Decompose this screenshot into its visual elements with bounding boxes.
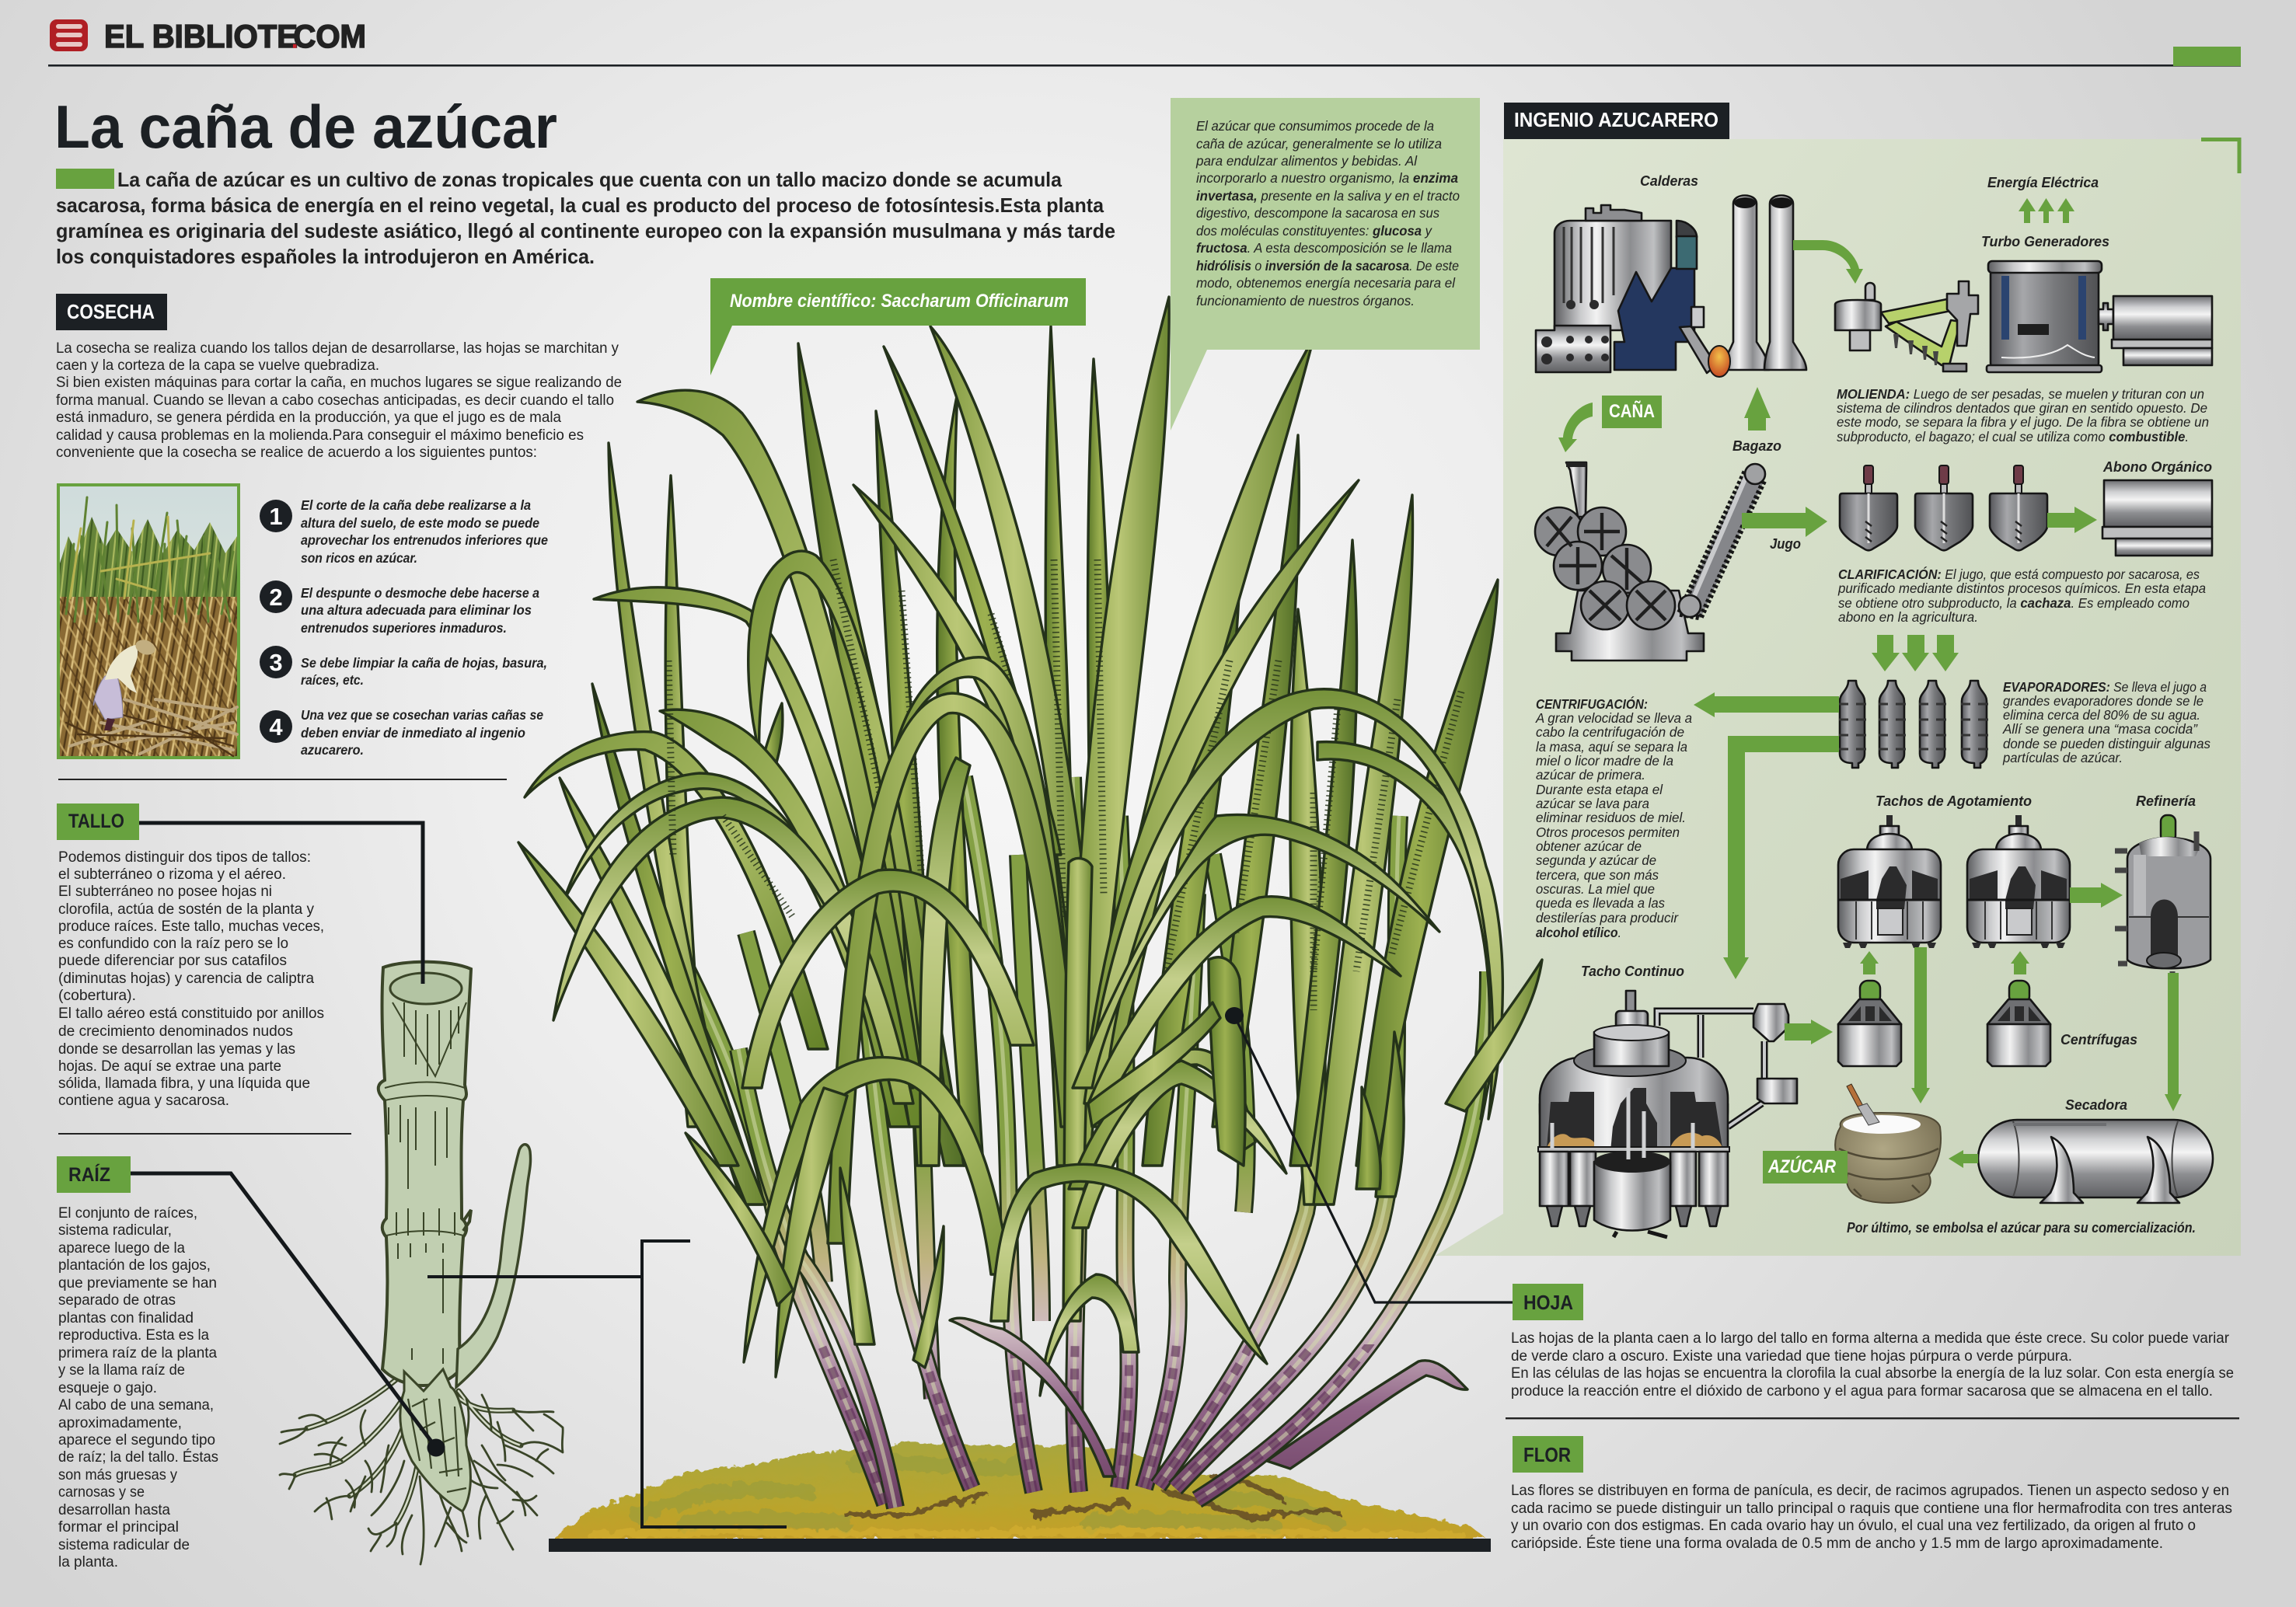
text: molienda: este modo, se separa la fibra y el jugo. De la fibra se obtiene un: [1837, 414, 2209, 430]
point 1: altura del suelo, de este modo se puede: [301, 515, 539, 531]
machine: abono orgánico: [2102, 480, 2212, 556]
text: evaporadores: Allí se genera una “masa cocida”: [2002, 721, 2198, 737]
point 2: 2: [269, 584, 283, 611]
point 4: 4: [269, 713, 283, 741]
callout: sugar digestion: El azúcar que consumimos procede de la: [1196, 118, 1434, 134]
leaf hatching: [668, 559, 1461, 1010]
point 1: 1: [269, 503, 283, 530]
hoja text: produce la reacción entre el dióxido de carbono y el agua para formar sacarosa que se almacena en el tallo.: [1511, 1382, 2213, 1400]
point 2: El despunte o desmoche debe hacerse a: [301, 585, 539, 601]
raiz text: plantación de los gajos,: [58, 1257, 211, 1274]
ingenio heading: [1504, 103, 1729, 139]
leader: tallo: [139, 823, 423, 984]
stem details: [385, 973, 471, 1364]
raiz text: y se la llama raíz de: [58, 1361, 185, 1379]
front blades: [686, 657, 1542, 1476]
arrow: down to evaporadores: [1872, 635, 1959, 671]
cosecha heading: COSECHA: [67, 300, 155, 323]
machine labels: Jugo: [1770, 535, 1801, 552]
machine: calderas: [1536, 196, 1806, 377]
point 1: son ricos en azúcar.: [301, 550, 417, 566]
machine labels: Por último, se embolsa el azúcar para su comercialización.: [1847, 1219, 2196, 1236]
callout: sugar digestion: para endulzar alimentos y bebidas. Al: [1195, 153, 1418, 169]
text: clarificación: se obtiene otro subproducto, la cachaza. Es empleado como: [1838, 595, 2190, 611]
tallo text: puede diferenciar por sus catafilos: [58, 952, 287, 969]
tallo text: Podemos distinguir dos tipos de tallos:: [58, 849, 311, 866]
callout: sugar digestion: fructosa. A esta descomposición se le llama: [1196, 240, 1452, 256]
raiz text: aparece el segundo tipo: [58, 1431, 215, 1448]
text: centrifugación: segunda y azúcar de: [1536, 852, 1656, 868]
photo: harvest in the cane field: [57, 483, 240, 759]
hoja heading: HOJA: [1523, 1291, 1573, 1314]
text: centrifugación: tercera, que son más: [1536, 867, 1659, 883]
hoja text: En las células de las hojas se encuentra la clorofila la cual absorbe la energía de la luz solar. Con esta energía se: [1511, 1365, 2234, 1382]
arrow: refinería to secadora: [2165, 973, 2182, 1111]
callout: sugar digestion: caña de azúcar, generalmente se lo utiliza: [1196, 136, 1442, 152]
raiz text: separado de otras: [58, 1292, 176, 1309]
arrow: bagazo: [1744, 387, 1771, 431]
raiz text: plantas con finalidad: [58, 1309, 194, 1326]
intro text block: [56, 168, 1115, 268]
hoja heading: [1513, 1284, 1583, 1320]
cosecha text: conveniente que la cosecha se realice de acuerdo a los siguientes puntos:: [56, 444, 537, 461]
text: centrifugación: A gran velocidad se lleva a: [1535, 710, 1692, 726]
tallo text: El tallo aéreo está constituido por anillos: [58, 1005, 324, 1022]
arrow: secadora to saco: [1949, 1150, 1978, 1168]
raiz text: aparece luego de la: [58, 1239, 185, 1257]
machine: tacho continuo: [1538, 991, 1797, 1237]
stem body: [379, 962, 471, 1386]
callout: sugar digestion: hidrólisis o inversión de la sacarosa. De este: [1196, 258, 1459, 274]
point 2: [260, 580, 539, 636]
text: centrifugación: Durante esta etapa el: [1536, 782, 1663, 797]
section: flor: [1511, 1436, 2232, 1552]
machine: centrífugas: [1838, 981, 2050, 1066]
label: azúcar: AZÚCAR: [1767, 1156, 1837, 1177]
flor heading: [1513, 1436, 1583, 1473]
hoja text: [1511, 1330, 2234, 1400]
point 3: 3: [269, 649, 283, 676]
roots: [280, 1379, 563, 1564]
arrow: evaporadores to tacho continuo: [1723, 736, 1839, 979]
label: azúcar: [1763, 1151, 1848, 1183]
ground mound: [550, 1443, 1488, 1540]
callout: sugar digestion: [1171, 98, 1480, 431]
young shoot: [456, 1145, 531, 1387]
raiz text: desarrollan hasta: [58, 1501, 170, 1518]
stalk mottling: [818, 1344, 1374, 1505]
header: logo: [50, 18, 366, 54]
text: evaporadores: grandes evaporadores donde se le: [2003, 693, 2204, 709]
title: La caña de azúcar: [54, 92, 557, 161]
flor text: [1511, 1482, 2232, 1552]
raiz heading: [57, 1156, 131, 1193]
tallo text: donde se desarrollan las yemas y las: [58, 1041, 295, 1058]
machine: turbina: [1835, 281, 1978, 371]
text: centrifugación: queda es llevada a las: [1536, 895, 1665, 911]
leader lines: [131, 823, 1513, 1527]
callout: sugar digestion: invertasa, presente en la saliva y en el tracto: [1196, 188, 1460, 204]
label: caña: CAÑA: [1609, 400, 1655, 422]
point 2: entrenudos superiores inmaduros.: [301, 620, 507, 636]
machine: evaporadores: [1839, 681, 1988, 768]
callout: sugar digestion: incorporarlo a nuestro organismo, la enzima: [1196, 170, 1458, 186]
cosecha text: calidad y causa problemas en la molienda.Para conseguir el máximo beneficio es: [56, 427, 584, 444]
numbered points: [260, 497, 548, 758]
text: centrifugación: CENTRIFUGACIÓN:: [1536, 695, 1648, 712]
flor text: Las flores se distribuyen en forma de panícula, es decir, de racimos agrupados. Tienen un aspecto sedoso y en: [1511, 1482, 2229, 1499]
machine: tachos de agotamiento: [1838, 815, 2070, 948]
text: centrifugación: obtener azúcar de: [1536, 838, 1642, 854]
raiz text: aproximadamente,: [58, 1414, 182, 1431]
header green tab: [2173, 47, 2241, 66]
root crown: [400, 1369, 470, 1511]
callout: scientific name: [710, 278, 1086, 375]
machine labels: Abono Orgánico: [2102, 458, 2212, 475]
tallo text: sólida, llamada fibra, y una líquida que: [58, 1075, 310, 1092]
tallo heading: TALLO: [68, 810, 124, 832]
point 3: Se debe limpiar la caña de hojas, basura,: [301, 655, 547, 671]
hoja text: de verde claro a oscuro. Existe una variedad que tiene hojas púrpura o verde púrpura.: [1511, 1347, 2072, 1365]
base bar: [549, 1539, 1491, 1552]
arrow: energía eléctrica: [2019, 198, 2074, 223]
raiz text: carnosas y se: [58, 1483, 145, 1501]
machine labels: Refinería: [2136, 793, 2196, 809]
point 1: El corte de la caña debe realizarse a la: [301, 497, 531, 513]
arrow: caña to molino: [1558, 403, 1593, 452]
raiz text: sistema radicular,: [58, 1222, 172, 1239]
text: evaporadores: donde se pueden distinguir algunas: [2003, 736, 2211, 751]
tallo text: el subterráneo o rizoma y el aéreo.: [58, 866, 286, 883]
tallo text: produce raíces. Este tallo, muchas veces,: [58, 918, 324, 935]
machine labels: Centrífugas: [2060, 1031, 2137, 1048]
arrow: jugo: [1742, 507, 1827, 537]
point 3: [260, 646, 547, 688]
section: hoja: [1511, 1284, 2234, 1400]
arrow: tachos to refinería: [2070, 883, 2123, 908]
section: raiz: [57, 1156, 218, 1570]
tallo text: clorofila, actúa de sostén de la planta y: [58, 901, 314, 918]
back blades: [518, 297, 1498, 1204]
arrow: tachos to saco: [1911, 947, 1930, 1103]
machine labels: Calderas: [1640, 173, 1698, 189]
text: clarificación: abono en la agricultura.: [1838, 609, 1978, 625]
text: centrifugación: azúcar de primera.: [1536, 767, 1645, 783]
tallo text: El subterráneo no posee hojas ni: [58, 883, 272, 900]
raiz text: son más gruesas y: [58, 1466, 177, 1483]
cosecha text: está inmaduro, se genera pérdida en la producción, ya que el jugo es de mala: [56, 409, 561, 426]
machine labels: Turbo Generadores: [1981, 233, 2109, 249]
text: evaporadores: partículas de azúcar.: [2002, 750, 2123, 765]
machine labels: [1581, 173, 2212, 1236]
intro text block: los conquistadores españoles la introdujeron en América.: [56, 245, 595, 268]
callout: scientific name: Nombre científico: Saccharum Officinarum: [730, 291, 1069, 312]
intro text block: sacarosa, forma básica de energía en el reino vegetal, la cual es producto del proceso de fotosíntesis.Esta planta: [56, 193, 1104, 217]
leader: tallo bracket: [427, 1241, 787, 1527]
text: clarificación: [1837, 566, 2206, 625]
raiz text: sistema radicular de: [58, 1536, 190, 1553]
callout: sugar digestion: dos moléculas constituyentes: glucosa y: [1196, 223, 1432, 239]
point 3: raíces, etc.: [301, 672, 364, 688]
callout: sugar digestion: modo, obtenemos energía necesaria para el: [1196, 275, 1456, 291]
process diagram: [1535, 173, 2213, 1237]
intro green marker: [56, 169, 114, 189]
raiz text: formar el principal: [58, 1518, 179, 1536]
woman harvesting: [93, 637, 157, 730]
text: molienda: MOLIENDA: Luego de ser pesadas, se muelen y trituran con un: [1837, 386, 2204, 402]
flor heading: FLOR: [1523, 1443, 1571, 1466]
arrow: calderas to turbina: [1793, 240, 1863, 284]
tallo text: [58, 849, 324, 1109]
arrow: to centrifugación: [1694, 692, 1839, 717]
machine labels: Bagazo: [1732, 437, 1781, 454]
raiz text: El conjunto de raíces,: [58, 1204, 197, 1222]
icon: sugar sack: [1835, 1084, 1941, 1203]
text: centrifugación: azúcar se lava para: [1536, 796, 1649, 811]
tallo text: es confundido con la raíz pero se lo: [58, 935, 288, 952]
machine labels: Secadora: [2065, 1096, 2127, 1113]
illustration: stem and roots: [280, 962, 563, 1564]
flor text: y un ovario con dos estigmas. En cada ovario hay un óvulo, el cual una vez fertilizado, da origen al fruto o: [1511, 1517, 2196, 1534]
raiz text: Al cabo de una semana,: [58, 1396, 214, 1414]
text: evaporadores: [2002, 679, 2211, 765]
leader: raíz: [131, 1173, 445, 1456]
tallo text: contiene agua y sacarosa.: [58, 1092, 229, 1109]
text: molienda: [1837, 386, 2209, 444]
text: centrifugación: cabo la centrifugación de: [1536, 724, 1684, 740]
flor text: cada racimo se puede distinguir un tallo principal o raquis que contiene una flor hermafrodita con tres anteras: [1511, 1500, 2232, 1517]
machine labels: Tacho Continuo: [1581, 963, 1684, 979]
text: clarificación: purificado mediante distintos procesos químicos. En esta etapa: [1837, 580, 2206, 596]
machine: secadora: [1978, 1120, 2213, 1203]
point 4: deben enviar de inmediato al ingenio: [301, 725, 525, 741]
machine: turbo generador: [1987, 261, 2212, 372]
tallo text: hojas. De aquí se extrae una parte: [58, 1058, 281, 1075]
raiz text: reproductiva. Esta es la: [58, 1326, 209, 1344]
panel: ingenio azucarero: [1435, 139, 2241, 1256]
panel corner bracket: [2201, 140, 2239, 173]
point 2: una altura adecuada para eliminar los: [301, 602, 532, 618]
point 4: [260, 707, 543, 758]
text: centrifugación: la masa, aquí se separa la: [1536, 739, 1687, 755]
stalks: [684, 777, 1488, 1508]
machine labels: Tachos de Agotamiento: [1876, 793, 2032, 809]
raiz heading: RAÍZ: [68, 1163, 110, 1186]
hoja text: Las hojas de la planta caen a lo largo del tallo en forma alterna a medida que éste crece. Su color puede variar: [1511, 1330, 2229, 1347]
text: centrifugación: miel o licor madre de la: [1536, 753, 1673, 769]
text: centrifugación: Otros procesos permiten: [1536, 824, 1680, 840]
cosecha text: La cosecha se realiza cuando los tallos dejan de desarrollarse, las hojas se marchitan y: [56, 340, 619, 357]
callout: sugar digestion: funcionamiento de nuestros órganos.: [1196, 293, 1415, 309]
logo wordmark: EL BIBLIOTE.COM: [104, 18, 366, 54]
header rule: [48, 64, 2241, 67]
text: molienda: sistema de cilindros dentados que giran en sentido opuesto. De: [1837, 400, 2207, 416]
intro text block: gramínea es originaria del sudeste asiático, llegó al continente europeo con la expansión musulmana y más tarde: [56, 219, 1115, 242]
text: centrifugación: destilerías para producir: [1536, 910, 1679, 926]
machine: refinería: [2115, 815, 2211, 981]
icon: red logo mark: [50, 19, 88, 51]
raiz text: la planta.: [58, 1553, 118, 1570]
arrows: centrífugas to tachos: [1860, 951, 2029, 974]
arrow: to abono: [2047, 507, 2097, 533]
section: cosecha: [56, 294, 622, 759]
cosecha text: [56, 340, 622, 461]
tallo text: (diminutas hojas) y carencia de caliptra: [58, 970, 314, 987]
text: clarificación: CLARIFICACIÓN: El jugo, que está compuesto por sacarosa, es: [1838, 566, 2200, 582]
arrows: [1558, 198, 2182, 1168]
text: evaporadores: EVAPORADORES: Se lleva el jugo a: [2003, 679, 2207, 695]
raiz text: esqueje o gajo.: [58, 1379, 157, 1396]
raiz text: que previamente se han: [58, 1274, 217, 1292]
cosecha heading: [56, 294, 167, 330]
point 1: aprovechar los entrenudos inferiores que: [301, 532, 548, 548]
section: tallo: [57, 804, 324, 1109]
text: centrifugación: oscuras. La miel que: [1536, 881, 1655, 897]
machine: molino: [1535, 462, 1765, 661]
cosecha text: Si bien existen máquinas para cortar la caña, en muchos lugares se sigue realizando de: [56, 374, 622, 391]
cosecha text: caen y la corteza de la capa se vuelve quebradiza.: [56, 357, 379, 374]
machine labels: Energía Eléctrica: [1987, 174, 2099, 190]
point 4: azucarero.: [301, 742, 364, 758]
text: molienda: subproducto, el bagazo; el cual se utiliza como combustible.: [1837, 429, 2189, 444]
tallo text: (cobertura).: [58, 987, 136, 1004]
leader: hoja: [1225, 1007, 1513, 1302]
raiz text: primera raíz de la planta: [58, 1344, 217, 1361]
label: caña: [1602, 396, 1662, 428]
text: centrifugación: eliminar residuos de miel.: [1536, 810, 1686, 825]
callout: sugar digestion: digestivo, descompone la sacarosa en sus: [1196, 205, 1439, 221]
tallo heading: [57, 804, 139, 840]
machine: clarificadores: [1840, 465, 2047, 550]
text: centrifugación: [1535, 695, 1692, 940]
ingenio heading: INGENIO AZUCARERO: [1514, 108, 1719, 131]
raiz text: [58, 1204, 218, 1570]
raiz text: de raíz; la del tallo. Éstas: [58, 1448, 218, 1466]
arrow: tacho to centrífuga: [1785, 1020, 1833, 1044]
point 1: [260, 497, 548, 566]
flor text: cariópside. Éste tiene una forma ovalada de 0.5 mm de ancho y 1.5 mm de largo aproximadamente.: [1511, 1534, 2163, 1552]
text: centrifugación: alcohol etílico.: [1536, 925, 1621, 940]
intro text block: La caña de azúcar es un cultivo de zonas tropicales que cuenta con un tallo macizo donde se acumula: [117, 168, 1063, 191]
point 4: Una vez que se cosechan varias cañas se: [301, 707, 543, 723]
tallo text: de crecimiento denominados nudos: [58, 1023, 293, 1040]
cosecha text: forma manual. Cuando se llevan a cabo cosechas anticipadas, es decir cuando el tallo: [56, 392, 614, 409]
text: evaporadores: elimina cerca del 80% de su agua.: [2003, 707, 2200, 723]
illustration: sugar cane plant: [518, 297, 1542, 1540]
